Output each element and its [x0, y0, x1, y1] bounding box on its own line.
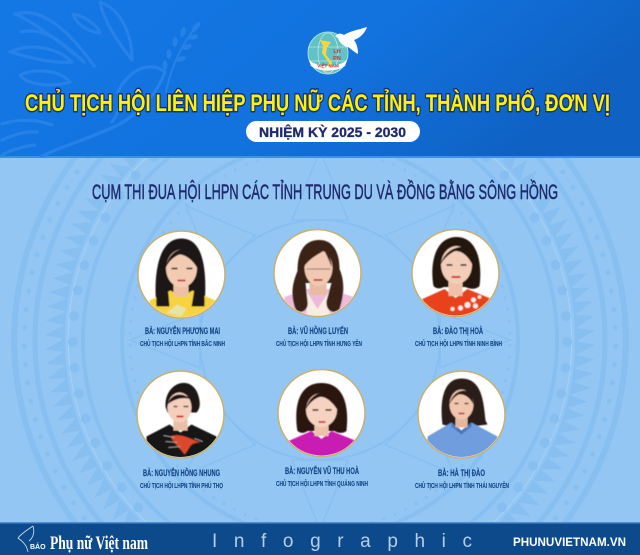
panel: light blue content background with bronze drum pattern	[0, 132, 640, 548]
portrait: Hà Thị Đào	[418, 371, 505, 460]
name: Nguyễn Phương Mai	[140, 325, 225, 348]
name: Nguyễn Vũ Thu Hoà: CHỦ TỊCH HỘI LHPN TỈNH QUẢNG NINH	[276, 479, 368, 488]
icon: LHPN Vietnam logo: VIỆT NAM	[317, 62, 339, 68]
portrait: Đào Thị Hoà	[412, 230, 499, 318]
icon: LHPN Vietnam logo	[308, 27, 367, 74]
name: Nguyễn Vũ Thu Hoà	[276, 465, 368, 488]
name: Vũ Hồng Luyến: CHỦ TỊCH HỘI LHPN TỈNH HƯNG YÊN	[276, 339, 362, 348]
name: Đào Thị Hoà: CHỦ TỊCH HỘI LHPN TỈNH NINH BÌNH	[415, 339, 502, 348]
name: Hà Thị Đào: BÀ: HÀ THỊ ĐÀO	[438, 468, 485, 478]
term badge	[246, 121, 420, 142]
portrait: Nguyễn Phương Mai	[138, 231, 225, 320]
name: Đào Thị Hoà	[415, 326, 502, 348]
name: Nguyễn Vũ Thu Hoà: BÀ: NGUYỄN VŨ THU HOÀ	[285, 465, 359, 476]
footer bar	[0, 522, 640, 555]
icon: LHPN Vietnam logo: PN	[333, 56, 341, 62]
name: Đào Thị Hoà: BÀ: ĐÀO THỊ HOÀ	[433, 326, 483, 336]
name: Nguyễn Phương Mai: BÀ: NGUYỄN PHƯƠNG MAI	[145, 325, 220, 336]
footer brand logo: Phụ nữ Việt nam	[50, 533, 148, 554]
icon: LHPN Vietnam logo: LH	[333, 49, 341, 55]
name: Vũ Hồng Luyến: BÀ: VŨ HỒNG LUYẾN	[288, 325, 348, 336]
footer website: PHUNUVIETNAM.VN	[513, 537, 626, 549]
icon: watermark dove with olive branch	[2, 2, 202, 156]
footer brand logo	[18, 526, 148, 554]
footer label: Infographic: Infographic	[212, 531, 472, 552]
term badge: NHIỆM KỲ 2025 - 2030	[259, 123, 406, 140]
name: Nguyễn Hồng Nhung	[140, 467, 223, 490]
portrait: Vũ Hồng Luyến	[274, 230, 361, 318]
portrait: Nguyễn Hồng Nhung	[137, 371, 224, 460]
name: Nguyễn Hồng Nhung: CHỦ TỊCH HỘI LHPN TỈNH PHÚ THỌ	[140, 481, 223, 490]
portrait: Nguyễn Vũ Thu Hoà	[278, 370, 365, 458]
footer brand logo: BÁO	[30, 542, 46, 551]
name: Hà Thị Đào: CHỦ TỊCH HỘI LHPN TỈNH THÁI NGUYÊN	[415, 481, 509, 490]
name: Hà Thị Đào	[415, 468, 509, 490]
name: Vũ Hồng Luyến	[276, 325, 362, 348]
panel: blue header band	[0, 0, 640, 158]
name: Nguyễn Hồng Nhung: BÀ: NGUYỄN HỒNG NHUNG	[143, 467, 220, 478]
name: Nguyễn Phương Mai: CHỦ TỊCH HỘI LHPN TỈNH BẮC NINH	[140, 339, 225, 348]
